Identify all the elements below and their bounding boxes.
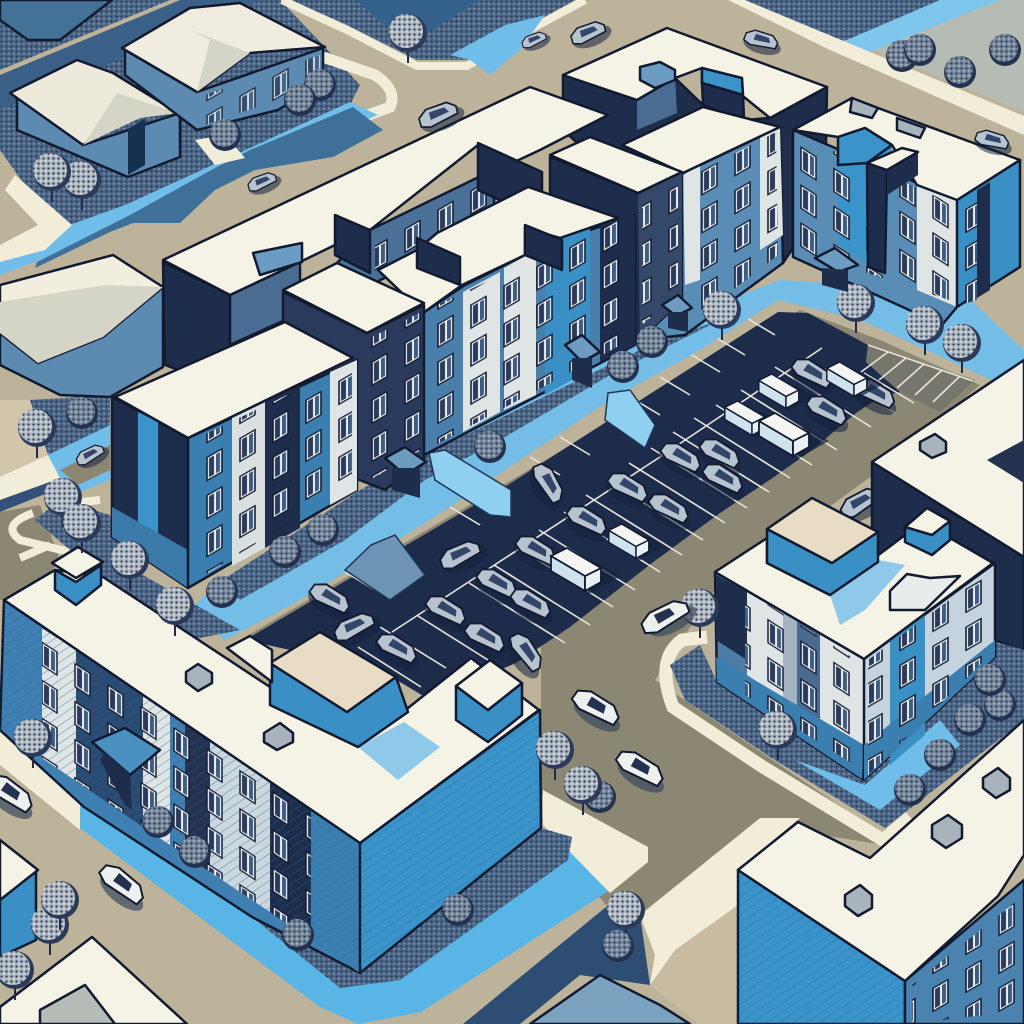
walkway island two — [605, 390, 655, 448]
house: barn — [10, 60, 180, 177]
building: long back block — [163, 87, 608, 400]
house: top-centre — [122, 3, 325, 130]
curb around building H — [666, 637, 910, 840]
cream block behind building A — [227, 636, 272, 682]
building: right back wing — [622, 107, 783, 340]
plaza bottom centre — [640, 818, 800, 1024]
parking lot navy surface — [245, 312, 900, 700]
building A large front block — [0, 547, 541, 973]
house: left — [0, 255, 163, 397]
house: top-left strip — [0, 0, 112, 40]
plaza sand area — [650, 905, 738, 1024]
tower: dark centre-top — [550, 137, 682, 340]
parking stripes — [310, 317, 973, 687]
asphalt south of building H — [545, 700, 885, 915]
left cream band — [0, 455, 60, 500]
top-centre lawn — [290, 0, 575, 60]
top-centre blue patch — [450, 15, 545, 75]
left cream loop curb — [12, 500, 100, 558]
upper-right gravel verge — [733, 0, 940, 43]
left gravel bed — [35, 500, 240, 640]
gravel planting along central buildings — [215, 320, 720, 600]
lower-left cream path — [0, 175, 72, 262]
top-centre curb — [282, 0, 585, 66]
upper-left neighbourhood base — [0, 0, 360, 235]
top-centre building — [355, 0, 480, 35]
bottom-left bright sidewalk — [80, 800, 610, 1024]
road shadow at bottom — [463, 907, 650, 1024]
left walk — [48, 425, 110, 500]
road shadow — [35, 107, 383, 268]
building: right top — [793, 98, 1020, 325]
car behind right building — [837, 481, 892, 528]
small crossing path — [195, 135, 245, 165]
upper-left sidewalk — [0, 102, 378, 275]
building: middle front — [112, 322, 357, 588]
upper-left blue street — [0, 0, 260, 110]
upper-left lawn strip — [0, 0, 170, 70]
corner curb — [543, 790, 648, 893]
house: bottom-left block — [0, 840, 187, 1024]
building: centre wing — [378, 187, 635, 455]
upper-right curb — [728, 0, 1024, 135]
tower: dark centre-front — [283, 263, 424, 490]
parking bay patch — [866, 345, 975, 412]
building H right centre — [715, 498, 995, 780]
left-side sand — [0, 400, 48, 478]
porches — [385, 248, 858, 498]
left grey road — [0, 505, 60, 600]
building: right edge dark — [872, 360, 1024, 652]
building: bottom right — [738, 720, 1024, 1024]
building: back top block — [563, 28, 827, 263]
blue lawn beside building H — [795, 720, 960, 810]
walkway canopy — [345, 535, 425, 600]
planting around building H — [670, 640, 1024, 828]
upper-right bushes — [886, 34, 1021, 88]
upper-right blue strip — [835, 0, 1000, 55]
upper-right parking block — [857, 0, 1024, 112]
left navy shadow — [0, 482, 55, 512]
central grey asphalt — [240, 310, 980, 911]
bottom-left road curb — [0, 725, 80, 830]
left grey road patch — [60, 445, 110, 485]
left-side gravel — [30, 395, 110, 455]
house: bottom centre — [530, 975, 690, 1024]
walkway island one — [429, 450, 511, 517]
blue walkway along central buildings — [190, 280, 1024, 640]
planting around building A — [252, 828, 572, 988]
upper-left curb — [323, 57, 392, 120]
